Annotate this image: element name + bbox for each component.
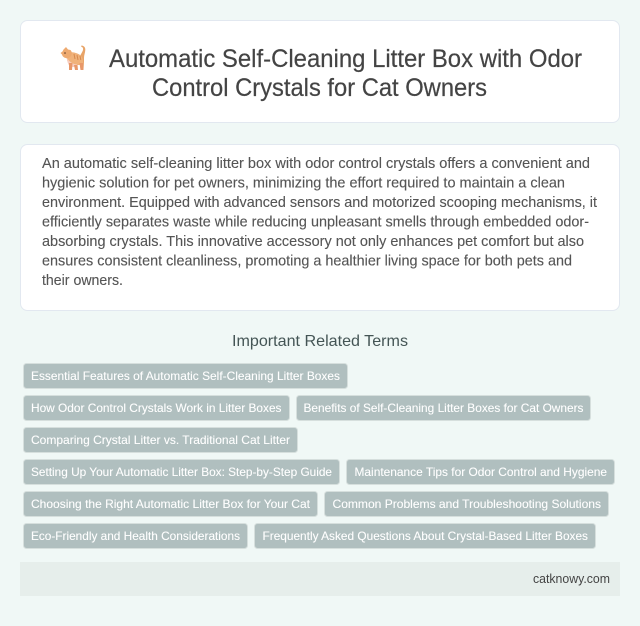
title: Control Crystals for Cat Owners bbox=[152, 74, 487, 102]
tag: How Odor Control Crystals Work in Litter Boxes bbox=[31, 401, 282, 415]
tag bbox=[24, 396, 290, 420]
text block: description: hygienic solution for pet owners, minimizing the effort required to maintain a clean bbox=[42, 176, 565, 192]
heading: related terms: Important Related Terms bbox=[232, 333, 408, 350]
panel: term tags bbox=[24, 364, 614, 548]
tag bbox=[24, 460, 340, 484]
tag bbox=[24, 428, 298, 452]
panel: description bbox=[20, 144, 620, 311]
tag: Choosing the Right Automatic Litter Box for Your Cat bbox=[31, 497, 311, 511]
panel: title card bbox=[20, 20, 620, 123]
tag: Maintenance Tips for Odor Control and Hygiene bbox=[354, 465, 607, 479]
tag bbox=[324, 492, 608, 516]
title bbox=[109, 45, 582, 102]
tag bbox=[346, 460, 614, 484]
footer bbox=[20, 562, 620, 596]
tag: Setting Up Your Automatic Litter Box: Step-by-Step Guide bbox=[31, 465, 332, 479]
text block: description: their owners. bbox=[42, 273, 123, 289]
tag: Benefits of Self-Cleaning Litter Boxes for Cat Owners bbox=[304, 401, 584, 415]
tag: Common Problems and Troubleshooting Solutions bbox=[332, 497, 601, 511]
text block: description: ensures consistent cleanliness, promoting a healthier living space for both pets and bbox=[42, 254, 572, 270]
tag bbox=[296, 396, 590, 420]
footer: catknowy.com bbox=[533, 572, 610, 586]
text block: description: absorbing crystals. This innovative accessory not only enhances pet comfort but also bbox=[42, 234, 584, 250]
tag: Essential Features of Automatic Self-Cleaning Litter Boxes bbox=[31, 369, 340, 383]
tag bbox=[24, 524, 248, 548]
tag bbox=[254, 524, 596, 548]
title: Automatic Self-Cleaning Litter Box with Odor bbox=[109, 45, 582, 73]
tag: Frequently Asked Questions About Crystal-Based Litter Boxes bbox=[262, 529, 588, 543]
text block: description: efficiently separates waste while reducing unpleasant smells through embedded odor- bbox=[42, 214, 589, 230]
icon: cat bbox=[60, 46, 85, 70]
text block: description: environment. Equipped with advanced sensors and motorized scooping mechanisms, it bbox=[42, 195, 597, 211]
tag bbox=[24, 492, 318, 516]
text block: description: An automatic self-cleaning litter box with odor control crystals offers a convenient and bbox=[42, 156, 590, 172]
text block: description bbox=[42, 156, 597, 289]
tag bbox=[24, 364, 348, 388]
tag: Eco-Friendly and Health Considerations bbox=[31, 529, 240, 543]
tag: Comparing Crystal Litter vs. Traditional Cat Litter bbox=[31, 433, 290, 447]
